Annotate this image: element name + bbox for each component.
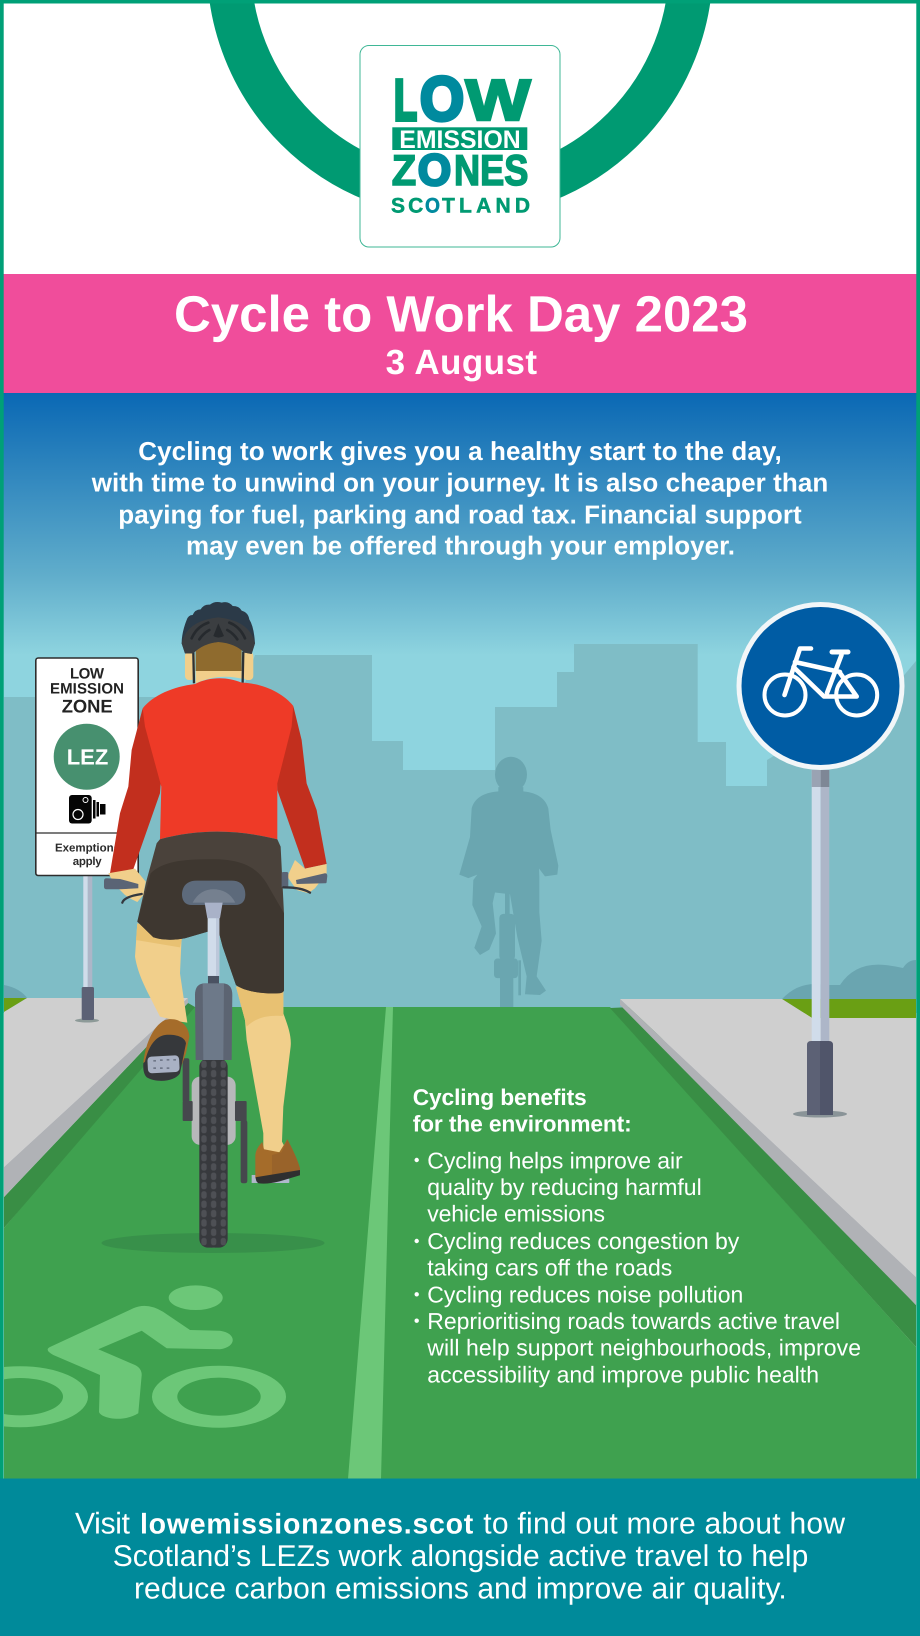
left pavement	[4, 998, 188, 1197]
icon: bicycle	[764, 648, 877, 716]
white header background	[0, 0, 920, 274]
benefits list: accessibility and improve public health	[427, 1361, 819, 1387]
teal footer	[0, 1478, 920, 1636]
right shoe	[255, 1139, 300, 1184]
benefits list: Cycling reduces congestion by	[427, 1228, 740, 1254]
sign board	[36, 658, 138, 876]
distant cyclist silhouette	[459, 757, 558, 1007]
bushes	[4, 960, 916, 999]
helmet	[182, 602, 255, 654]
date subtitle: 3 August	[386, 343, 537, 382]
icon: speed camera	[69, 795, 106, 824]
title: Cycle to Work Day 2023	[174, 286, 748, 343]
intro text: paying for fuel, parking and road tax. Financial support	[118, 499, 802, 529]
sign disc	[736, 602, 904, 770]
intro text	[91, 436, 828, 560]
exemptions panel text: apply	[73, 856, 102, 868]
footer text	[75, 1507, 845, 1605]
green cycle lane	[4, 1007, 916, 1479]
rear wheel	[199, 1058, 228, 1248]
shorts	[137, 832, 284, 993]
cycle route sign	[736, 602, 904, 1118]
hands	[108, 860, 327, 902]
right pavement	[620, 999, 916, 1305]
city skyline	[4, 644, 916, 1012]
benefits text block	[413, 1084, 861, 1387]
LEZ road sign	[36, 658, 138, 1022]
benefits list: quality by reducing harmful	[427, 1174, 702, 1200]
logo: Low Emission Zones Scotland: Z	[392, 147, 416, 195]
intro text: may even be offered through your employer.	[186, 530, 735, 560]
bike lower parts and legs	[135, 923, 300, 1248]
leg right	[236, 987, 291, 1153]
saddle	[182, 881, 245, 918]
jersey, arms and shorts	[104, 602, 327, 993]
benefits list	[414, 1147, 861, 1387]
chainring	[192, 1077, 236, 1145]
sign heading: LOW	[70, 665, 105, 682]
rear leg left	[135, 923, 187, 1023]
logo: Low Emission Zones Scotland: O	[418, 146, 451, 195]
benefits heading	[413, 1084, 632, 1137]
benefits list: Cycling reduces noise pollution	[427, 1281, 743, 1307]
footer text: lowemissionzones.scot	[140, 1508, 474, 1540]
cranks	[183, 1058, 289, 1183]
grass strips	[4, 998, 916, 1018]
logo: Low Emission Zones Scotland: O	[420, 65, 464, 134]
logo: Low Emission Zones Scotland: TLAND	[442, 195, 530, 218]
benefits list: taking cars off the roads	[427, 1255, 672, 1281]
footer text: Scotland’s LEZs work alongside active travel to help	[113, 1540, 808, 1573]
cycle sign pole	[793, 770, 847, 1118]
LEZ roundel: LEZ	[67, 744, 108, 769]
pink title band	[0, 274, 920, 394]
raised foot	[143, 1019, 189, 1081]
ground shadow	[102, 1233, 324, 1253]
logo: Low Emission Zones Scotland: SC	[391, 195, 423, 218]
exemptions panel text	[55, 843, 120, 868]
benefits list: Reprioritising roads towards active travel	[427, 1308, 840, 1334]
benefits list: vehicle emissions	[427, 1201, 605, 1227]
logo: Low Emission Zones Scotland	[360, 46, 560, 247]
sign pole	[75, 876, 99, 1022]
sky gradient	[0, 393, 920, 1013]
logo: Low Emission Zones Scotland: NES	[454, 147, 528, 195]
arm right	[277, 706, 327, 869]
lane shaded edges	[4, 1003, 916, 1347]
benefits heading: for the environment:	[413, 1111, 632, 1137]
logo: Low Emission Zones Scotland: EMISSION	[399, 126, 521, 154]
seatpost	[208, 918, 219, 976]
sign heading: EMISSION	[50, 680, 124, 697]
main cyclist	[102, 602, 327, 1253]
intro text: with time to unwind on your journey. It is also cheaper than	[91, 468, 828, 498]
road marking: cycle symbol	[0, 1285, 286, 1428]
lane centre line	[348, 1007, 393, 1479]
exemptions panel text: Exemptions	[55, 843, 120, 855]
neck and ears	[185, 642, 253, 683]
fender	[195, 975, 232, 1060]
arm left	[110, 708, 161, 873]
logo: Low Emission Zones Scotland: O	[425, 195, 440, 218]
intro text: Cycling to work gives you a healthy start to the day,	[138, 436, 782, 466]
handlebar grips and levers	[104, 872, 327, 903]
torso	[143, 678, 293, 839]
sign heading: ZONE	[62, 695, 113, 716]
green ring behind logo	[229, 0, 691, 196]
logo: Low Emission Zones Scotland: W	[466, 68, 531, 133]
benefits list: will help support neighbourhoods, improve	[426, 1335, 861, 1361]
footer text: Visit	[75, 1507, 131, 1540]
benefits list: Cycling helps improve air	[427, 1147, 683, 1173]
footer text: to find out more about how	[483, 1507, 845, 1540]
benefits heading: Cycling benefits	[413, 1084, 587, 1110]
LEZ roundel	[54, 724, 120, 790]
footer text: reduce carbon emissions and improve air quality.	[134, 1572, 787, 1605]
logo: Low Emission Zones Scotland: L	[394, 68, 417, 133]
sign heading	[50, 665, 124, 716]
